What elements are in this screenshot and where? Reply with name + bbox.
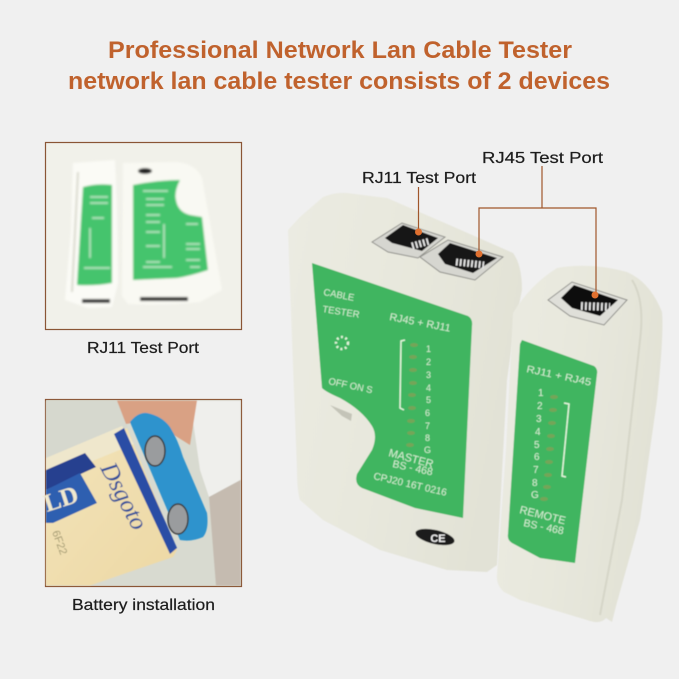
panel text: 3 [426,370,431,380]
green label panel: 7 [533,465,539,476]
label: Battery installation: Battery installation [72,597,215,614]
green label panel: 6 [534,452,540,463]
green label panel: BS - 468 [522,517,565,537]
panel text: 5 [426,395,431,405]
panel text: RJ45 + RJ11 [388,311,452,335]
background wall [190,401,240,497]
panel text: 2 [426,357,431,367]
CE mark [414,526,456,548]
blue battery clip [130,413,208,541]
remote RJ45 port [548,282,627,325]
battery: 6F22 [49,529,69,557]
bracket [400,340,405,410]
callout: RJ45 Test Port [476,150,604,298]
device: master tester [288,193,522,572]
green label panel: G [531,490,539,501]
green label panel [312,263,472,518]
panel text: TESTER [322,304,360,321]
panel: RJ11 photo of two devices [46,142,242,330]
battery: LD [41,481,82,518]
finger [117,401,197,445]
panel text: G [424,445,431,455]
green label panel: 1 [538,388,544,399]
battery: Dsgoto [94,457,152,535]
RJ45 port [420,240,503,280]
green label panel: RJ11 + RJ45 [525,364,593,389]
panel text: MASTER [387,447,435,471]
panel text: CABLE [322,287,355,304]
device: remote tester [497,266,662,622]
panel text: 8 [425,433,430,443]
title: Professional Network Lan Cable Tester [108,37,572,64]
label: RJ11 Test Port (left): RJ11 Test Port [87,340,200,357]
green label panel: 5 [534,440,540,451]
panel text: OFF ON S [327,376,374,396]
battery [41,426,177,586]
RJ11 port [372,223,445,258]
panel text: 6 [425,408,430,418]
panel text [322,287,452,499]
battery terminals [145,436,188,534]
switch [330,405,352,421]
panel text: 7 [425,421,430,431]
green label panel: 4 [535,427,541,438]
panel text: CPJ20 16T 0216 [372,471,448,499]
power LED [336,337,348,349]
LEDs [406,343,418,447]
master unit back [122,162,222,305]
panel text: 1 [426,344,431,354]
CE mark: CE [430,533,446,545]
green label panel [508,340,597,563]
callout: RJ11 Test Port: RJ11 Test Port [362,170,477,187]
green label panel: 3 [536,414,542,425]
green label panel: REMOTE [518,504,567,527]
callout: RJ11 Test Port [362,170,477,236]
panel: battery installation photo [41,400,241,586]
remote unit back [65,160,118,308]
green label panel: 2 [537,401,543,412]
callout: RJ45 Test Port: RJ45 Test Port [482,150,604,167]
panel text: BS - 468 [391,458,434,478]
panel text: 4 [426,383,431,393]
title [68,37,610,95]
green label panel: 8 [532,478,538,489]
title: network lan cable tester consists of 2 devices [68,68,610,95]
